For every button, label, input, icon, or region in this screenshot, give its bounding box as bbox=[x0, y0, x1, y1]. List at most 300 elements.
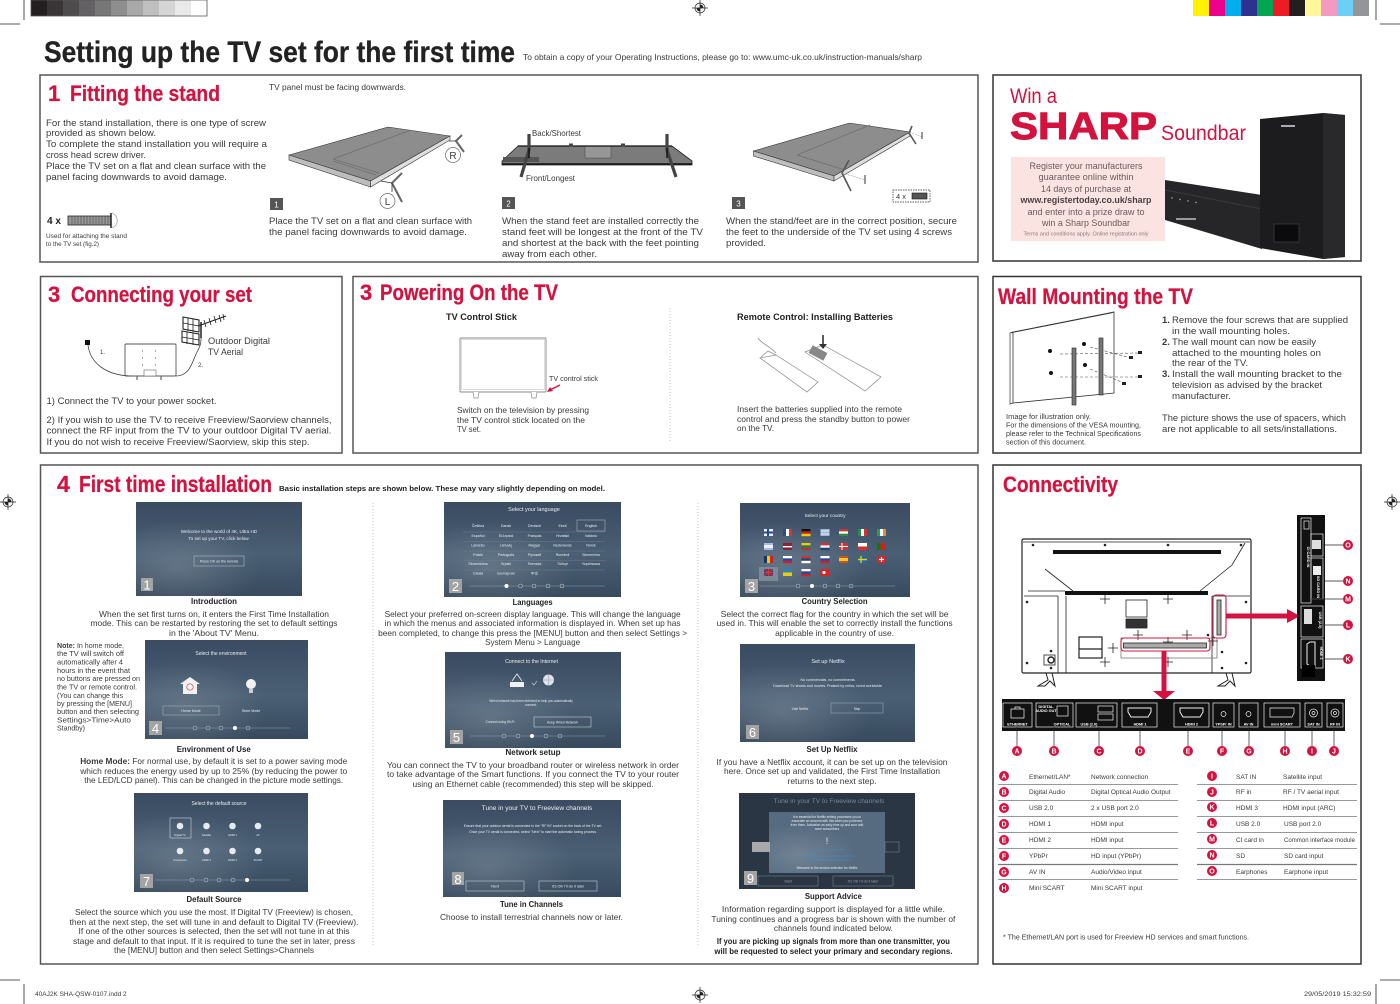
panel: wall mounting bbox=[993, 276, 1361, 453]
key letters on diagram: L bbox=[1346, 622, 1351, 630]
caption: support advice: Support Advice bbox=[805, 892, 862, 901]
intro text: provided as shown below. bbox=[46, 128, 156, 139]
caption 2: When the stand feet are installed correctly the bbox=[502, 216, 699, 227]
text: control stick bbox=[457, 405, 589, 434]
key table: left column: G bbox=[1001, 870, 1007, 876]
screen 2: languages bbox=[444, 502, 621, 597]
arrow: to side connectors bbox=[1226, 609, 1300, 623]
key table: right column: Earphones bbox=[1236, 869, 1268, 876]
screen 9: support advice: 9 bbox=[747, 871, 754, 886]
screen 9: support advice: It is essential for Netflix setting processes you to bbox=[793, 815, 861, 819]
screen 6: set up Netflix: 6 bbox=[749, 725, 756, 740]
steps: 2. bbox=[1162, 337, 1170, 348]
connector bar: side ports: HDMI 3 bbox=[1319, 647, 1323, 659]
caption 2: away from each other. bbox=[502, 249, 597, 260]
footer: file name: 40AJ2K SHA-QSW-0107.indd 2 bbox=[35, 991, 127, 998]
intro text: For the stand installation, there is one type of screw bbox=[46, 118, 266, 129]
heading: Connectivity bbox=[1003, 472, 1119, 497]
instructions: connect the RF input from the TV to your outdoor Digital TV aerial. bbox=[46, 426, 332, 436]
key table: left column: USB 2.0 bbox=[1029, 805, 1054, 812]
intro text: cross head screw driver. bbox=[46, 150, 146, 161]
pink call-out: guarantee online within bbox=[1038, 172, 1134, 182]
instructions: If you do not wish to receive Freeview/Saorview, skip this step. bbox=[46, 437, 310, 448]
connector bar: bottom ports: SAT IN bbox=[1307, 722, 1320, 726]
key table: left column: H bbox=[1001, 886, 1007, 892]
screen 2: languages: Українська bbox=[582, 562, 600, 566]
key table: right column: HDMI input (ARC) bbox=[1283, 805, 1335, 812]
screen 2: languages: Ελληνικά bbox=[499, 534, 513, 538]
screen 2: languages: Dansk bbox=[501, 524, 511, 528]
intro text: Place the TV set on a flat and clean surface with the bbox=[46, 161, 266, 172]
screen 4: environment: Home Mode bbox=[181, 709, 201, 713]
connector bar: bottom ports: AUDIO OUT bbox=[1035, 709, 1057, 713]
connector bar: bottom ports bbox=[1002, 699, 1345, 731]
key table: right column: USB port 2.0 bbox=[1284, 821, 1322, 828]
key table: left column: F bbox=[1002, 854, 1007, 860]
screen 7: default source: HDMI 3 bbox=[228, 858, 237, 862]
text: control stick: Switch on the television by pressing bbox=[457, 405, 589, 415]
key table: right column: J bbox=[1210, 790, 1214, 796]
screw note: to the TV set (fig.2) bbox=[46, 241, 99, 248]
caption: environment of use: Environment of Use bbox=[177, 745, 251, 754]
key table: left column: 2 x USB port 2.0 bbox=[1091, 805, 1139, 812]
text: batteries: on the TV. bbox=[737, 423, 774, 433]
footnote: * The Ethernet/LAN port is used for Freeview HD services and smart functions. bbox=[1003, 932, 1249, 942]
key letters on diagram: J bbox=[1332, 748, 1336, 756]
key table: right column: SAT IN bbox=[1236, 774, 1257, 781]
screen 5: network setup: connect. bbox=[525, 703, 537, 707]
pink call-out: Terms and conditions apply. Online registration only bbox=[1024, 232, 1149, 238]
illustration 1: TV lying flat with stand feet bbox=[289, 127, 464, 208]
screen 7: default source: 7 bbox=[143, 874, 150, 889]
caption: languages: Select your preferred on-screen display language. This will change the language bbox=[385, 609, 681, 619]
text: batteries: control and press the standby button to power bbox=[737, 414, 910, 424]
caption 2: stand feet will be longest at the front of the TV bbox=[502, 227, 704, 238]
key table: left column: HDMI input bbox=[1091, 821, 1124, 828]
pink call-out: Register your manufacturers bbox=[1030, 161, 1143, 171]
key table: left column: Audio/Video input bbox=[1091, 869, 1142, 876]
caption 3: provided. bbox=[726, 238, 766, 249]
illustration 2: TV back with feet: Front/Longest bbox=[526, 173, 576, 183]
illustration 2: TV back with feet bbox=[502, 128, 692, 183]
heading: Connecting your set bbox=[71, 282, 253, 307]
screen 2: languages: Deutsch bbox=[528, 524, 541, 528]
connector bar: bottom ports: OPTICAL bbox=[1054, 722, 1071, 726]
steps: television as advised by the bracket bbox=[1172, 380, 1322, 391]
caption: tune in channels: Tune in Channels bbox=[500, 900, 564, 909]
title: Setting up the TV set for the first time bbox=[44, 36, 515, 69]
key table: left column: B bbox=[1001, 790, 1007, 796]
heading: 3 bbox=[360, 280, 372, 305]
screen 5: network setup: Wired network has been detected to help you automatically bbox=[489, 699, 573, 703]
caption: country selection bbox=[717, 597, 953, 638]
screen 7: default source: SCART bbox=[254, 858, 263, 862]
screw note: Used for attaching the stand bbox=[46, 233, 127, 240]
screen 6: set up Netflix bbox=[740, 644, 915, 742]
instructions bbox=[46, 396, 332, 448]
screen 4: environment bbox=[145, 640, 308, 739]
caption 2 bbox=[502, 216, 704, 260]
screen 2: languages: Български bbox=[497, 572, 515, 576]
key table: right column: M bbox=[1209, 836, 1215, 844]
screen 8: tune in channels: Tune in your TV to Freeview channels bbox=[482, 805, 593, 812]
key table: right column: Common interface module bbox=[1284, 837, 1355, 844]
caption: support advice: If you are picking up signals from more than one transmitter, you bbox=[717, 936, 950, 946]
printer grayscale bar bbox=[31, 0, 207, 16]
screen 2: languages: Italiano bbox=[585, 534, 597, 538]
key letters on diagram: N bbox=[1345, 578, 1351, 586]
caption: environment of use: Home Mode: For normal use, by default it is set to a power saving mode bbox=[80, 756, 347, 766]
caption: network setup bbox=[387, 748, 679, 789]
diagram: TV rear bbox=[1022, 539, 1251, 686]
screen 2: languages: English bbox=[585, 524, 597, 528]
screw note bbox=[46, 233, 127, 248]
screen 6: set up Netflix: No commercials, no commitments. bbox=[800, 678, 856, 682]
caption: set up Netflix: here. Once set up and validated, the First Time Installation bbox=[724, 766, 940, 776]
key table: left column: Mini SCART bbox=[1029, 885, 1065, 892]
caption: environment of use: which reduces the energy used by up to 25% (by reducing the power to bbox=[79, 766, 347, 776]
connector bar: side ports bbox=[1297, 515, 1325, 681]
caption: country selection: Select the correct flag for the country in which the set will be bbox=[721, 609, 949, 619]
screen 7: default source: AV bbox=[256, 833, 260, 837]
caption 1: Place the TV set on a flat and clean surface with bbox=[269, 216, 472, 227]
note: home mode: Note: In home mode, bbox=[57, 641, 124, 650]
screen 2: languages: Nederlands bbox=[553, 544, 572, 548]
note: home mode: Standby) bbox=[57, 724, 85, 732]
pink call-out bbox=[1011, 157, 1165, 241]
screen 2: languages: Magyar bbox=[529, 544, 541, 548]
caption: languages: System Menu > Language bbox=[485, 637, 580, 647]
caption: environment of use: the LED/LCD panel). This can be changed in the picture mode settings. bbox=[84, 775, 343, 785]
screen 2: languages: Português bbox=[498, 553, 514, 557]
screen 2: languages: Latviešu bbox=[471, 544, 485, 548]
illustration note: section of this document. bbox=[1006, 440, 1086, 446]
caption: support advice: Information regarding support is displayed for a little while. bbox=[722, 904, 945, 914]
screen 2: languages: Select your language bbox=[508, 507, 560, 513]
key letters on diagram: F bbox=[1220, 748, 1225, 756]
key table: right column: CI card in bbox=[1236, 837, 1264, 844]
illustration note: Image for illustration only. bbox=[1006, 414, 1091, 421]
screen 2: languages: Polski bbox=[473, 553, 483, 557]
note: home mode: (You can change this bbox=[57, 691, 123, 700]
screen 2: languages: Français bbox=[528, 534, 542, 538]
caption: introduction: in the 'About TV' Menu. bbox=[169, 628, 259, 638]
steps: manufacturer. bbox=[1172, 391, 1231, 402]
key table: right column: L bbox=[1210, 820, 1215, 828]
key table: left column: HDMI input bbox=[1091, 837, 1124, 844]
screen 6: set up Netflix: Visit Netflix bbox=[792, 707, 809, 711]
text: control stick: TV set. bbox=[457, 424, 481, 434]
step badge 1: 1 bbox=[274, 200, 279, 210]
key table: right column: K bbox=[1209, 804, 1215, 812]
key table: left column: Mini SCART input bbox=[1091, 885, 1143, 892]
screen 2: languages: Română bbox=[556, 553, 569, 557]
caption: default source: Default Source bbox=[186, 895, 242, 904]
connector bar: bottom ports: AV IN bbox=[1244, 722, 1254, 726]
caption: introduction bbox=[90, 597, 338, 638]
caption: set up Netflix: returns to the next step. bbox=[788, 776, 876, 786]
screen 9: support advice: from them. Activation as early time up and sure add bbox=[791, 823, 864, 827]
screen 8: tune in channels: It's OK I'll do it later bbox=[552, 884, 585, 888]
footer: date stamp: 29/05/2019 15:32:59 bbox=[1304, 991, 1371, 998]
panel: fitting the stand bbox=[40, 75, 978, 262]
steps: 3. bbox=[1162, 369, 1170, 380]
panel: first time installation bbox=[40, 465, 978, 964]
key letters on diagram: H bbox=[1282, 748, 1288, 756]
screen 1: introduction: Welcome to the world of 4K, Ultra HD bbox=[181, 529, 258, 534]
text: batteries bbox=[737, 404, 910, 433]
note: home mode: Settings>Time>Auto bbox=[57, 716, 131, 724]
key table: left column: HD input (YPbPr) bbox=[1091, 853, 1141, 860]
pink call-out: www.registertoday.co.uk/sharp bbox=[1020, 195, 1152, 205]
step badge 1 bbox=[270, 198, 283, 210]
screw callout: 4 x bbox=[896, 192, 906, 201]
key letters on diagram: E bbox=[1186, 748, 1191, 756]
screen 2: languages: Türkçe bbox=[557, 562, 568, 566]
connector bar: bottom ports: YPbPr IN bbox=[1215, 722, 1232, 726]
printer colour bar bbox=[1193, 0, 1369, 16]
caption: network setup: You can connect the TV to your broadband router or wireless network in order bbox=[387, 760, 679, 770]
pink call-out: and enter into a prize draw to bbox=[1028, 207, 1144, 217]
screen 1: introduction: Press OK on the remote bbox=[200, 560, 238, 564]
pink call-out: 14 days of purchase at bbox=[1041, 184, 1131, 194]
caption: country selection: Country Selection bbox=[802, 597, 868, 606]
connector bar: bottom ports: mini SCART bbox=[1271, 722, 1294, 726]
screen 9: support advice: ! bbox=[826, 836, 828, 846]
steps: The wall mount can now be easily bbox=[1172, 337, 1316, 348]
caption: introduction: When the set first turns on, it enters the First Time Installation bbox=[99, 609, 329, 619]
screen 2: languages: Hrvatski bbox=[556, 534, 569, 538]
heading: Fitting the stand bbox=[70, 81, 220, 106]
screen 5: network setup: Connect to the Internet bbox=[505, 659, 558, 665]
illustration: TV front with control stick bbox=[460, 338, 598, 398]
screen 7: default source: HDMI 1 bbox=[228, 833, 237, 837]
steps bbox=[1162, 315, 1348, 435]
caption: introduction: Introduction bbox=[191, 597, 237, 606]
diagram: TV, plug and aerial bbox=[85, 314, 270, 380]
key table: left column: Network connection bbox=[1091, 774, 1148, 781]
caption: default source: Select the source which you use the most. If Digital TV (Freeview) is chosen, bbox=[75, 907, 353, 917]
screen 2: languages: Català bbox=[473, 572, 483, 576]
icon: screw: 4 x bbox=[47, 216, 61, 227]
screen 1: introduction: 1 bbox=[143, 578, 151, 592]
steps: Install the wall mounting bracket to the bbox=[1172, 369, 1342, 380]
panel: connectivity bbox=[993, 465, 1361, 964]
text: control stick: the TV control stick located on the bbox=[457, 415, 585, 425]
key table: right column: Earphone input bbox=[1284, 869, 1328, 876]
key letters on diagram: D bbox=[1137, 748, 1143, 756]
screen 2: languages: 中文 bbox=[531, 570, 538, 576]
connector bar: bottom ports: HDMI 1 bbox=[1134, 722, 1146, 726]
key table: right column: O bbox=[1209, 868, 1215, 876]
screen 2: languages: Svenska bbox=[528, 562, 541, 566]
connector bar: bottom ports: USB (2.0) bbox=[1081, 722, 1098, 726]
steps: 1. bbox=[1162, 315, 1170, 326]
caption: network setup: using an Ethernet cable (recommended) this step will be skipped. bbox=[412, 779, 654, 789]
note: home mode: no buttons are pressed on bbox=[57, 674, 140, 683]
caption: set up Netflix: If you have a Netflix account, it can be set up on the television bbox=[716, 757, 948, 767]
heading: Powering On the TV bbox=[380, 280, 558, 305]
note: home mode: by pressing the [MENU] bbox=[57, 699, 132, 708]
steps: in the wall mounting holes. bbox=[1172, 326, 1290, 337]
key table: right column: RF / TV aerial input bbox=[1283, 789, 1339, 796]
key table: left column: C bbox=[1001, 806, 1007, 812]
caption: support advice: will be requested to select your primary and secondary regions. bbox=[713, 946, 952, 956]
caption: support advice bbox=[711, 892, 956, 956]
key letters on diagram: G bbox=[1246, 748, 1252, 756]
panel: win a Sharp soundbar bbox=[993, 75, 1361, 261]
note: panel down: TV panel must be facing downwards. bbox=[269, 82, 406, 92]
screen 2: languages: Srpski bbox=[501, 562, 511, 566]
caption: languages: Languages bbox=[513, 598, 553, 607]
key table: left column: A bbox=[1001, 774, 1007, 780]
logo: SHARP: SHARP bbox=[1010, 106, 1157, 148]
note: home mode: the TV or remote control. bbox=[57, 682, 137, 692]
key letters on diagram: B bbox=[1051, 748, 1057, 756]
steps: attached to the mounting holes on bbox=[1172, 348, 1321, 359]
screen 7: default source bbox=[134, 793, 308, 892]
screen 4: environment: 4 bbox=[152, 721, 159, 736]
screen 9: support advice: Tune in your TV to Freeview channels bbox=[774, 798, 885, 805]
screen 2: languages: 2 bbox=[452, 579, 459, 594]
screen 9: support advice: It's OK I'll do it later bbox=[848, 880, 879, 884]
screen 4: environment: Select the environment bbox=[195, 651, 247, 657]
key table: left column: HDMI 2 bbox=[1029, 837, 1051, 844]
subtitle: instructions link: To obtain a copy of your Operating Instructions, please go to: www.umc-uk.co.uk/instruction-manuals/sharp bbox=[523, 52, 922, 62]
caption: default source: then at the next step, the set will tune in and default to Digital TV (Freeview). bbox=[70, 917, 358, 927]
screen 2: languages: Čeština bbox=[472, 523, 484, 528]
screen 5: network setup: Keep Wired Network bbox=[547, 720, 578, 724]
key table: right column: RF in bbox=[1236, 789, 1252, 796]
key table: left column: E bbox=[1002, 838, 1007, 844]
caption: country selection: applicable in the country of use. bbox=[775, 628, 894, 638]
panel: powering on the TV bbox=[353, 276, 978, 453]
screen 5: network setup: Connect using Wi-Fi bbox=[486, 720, 515, 724]
panel: connecting your set bbox=[40, 276, 342, 453]
text: batteries: Insert the batteries supplied into the remote bbox=[737, 404, 902, 414]
caption 1 bbox=[269, 216, 472, 238]
key table: right column: SD card input bbox=[1284, 853, 1324, 860]
caption: country selection: used in. This will enable the set to correctly install the functions bbox=[717, 618, 953, 628]
note: home mode: hours in the event that bbox=[57, 666, 131, 675]
key letters on diagram: M bbox=[1345, 596, 1351, 604]
illustration: TV front with control stick: TV control stick bbox=[549, 376, 598, 383]
screen 8: tune in channels: 8 bbox=[454, 872, 462, 887]
screen 2: languages: Español bbox=[472, 534, 485, 538]
caption 3: When the stand/feet are in the correct position, secure bbox=[726, 216, 957, 227]
key table: left column bbox=[998, 771, 1178, 893]
key letters on diagram: A bbox=[1014, 748, 1020, 756]
key table: right column: HDMI 3 bbox=[1236, 805, 1258, 812]
screen 4: environment: Store Mode bbox=[242, 709, 260, 713]
screen 2: languages: Русский bbox=[528, 553, 541, 557]
step badge 3 bbox=[732, 197, 745, 209]
key table: right column: Satellite input bbox=[1283, 774, 1322, 781]
caption: default source: stage and default to that input. If it is required to tune the set in later, press bbox=[73, 936, 355, 946]
screen 2: languages: Slovenčina bbox=[582, 553, 600, 557]
step badge 3: 3 bbox=[736, 200, 741, 208]
screen 9: support advice: associate an account with this when you purchase bbox=[792, 819, 863, 823]
caption: set up Netflix: Set Up Netflix bbox=[806, 745, 858, 754]
illustration 3: TV with feet attached bbox=[754, 123, 922, 191]
connector bar: side ports: USB (2.0) bbox=[1318, 612, 1322, 629]
caption 3: the feet to the underside of the TV set using 4 screws bbox=[726, 227, 952, 238]
diagram: TV, plug and aerial: Outdoor Digital bbox=[208, 336, 270, 346]
screen 6: set up Netflix: Skip bbox=[854, 707, 860, 711]
intro text: To complete the stand installation you will require a bbox=[46, 139, 268, 150]
steps: The picture shows the use of spacers, which bbox=[1162, 413, 1346, 424]
screen 7: default source: HDMI 2 bbox=[202, 858, 211, 862]
screen 6: set up Netflix: Set up Netflix bbox=[811, 659, 845, 665]
key table: right column: USB 2.0 bbox=[1236, 821, 1261, 828]
connector bar: bottom ports: DIGITAL bbox=[1039, 705, 1054, 709]
note: home mode bbox=[57, 641, 140, 732]
screw callout bbox=[893, 190, 930, 202]
caption: languages: in which the menus and associated information is displayed in. When set up has bbox=[385, 618, 681, 628]
screen 2: languages: Eesti bbox=[558, 524, 567, 528]
heading: 1 bbox=[48, 81, 60, 106]
caption: default source bbox=[70, 895, 358, 955]
key letters on diagram bbox=[1012, 540, 1353, 756]
key table: right column: N bbox=[1209, 852, 1215, 860]
sub-heading: batteries: Remote Control: Installing Batteries bbox=[737, 312, 893, 322]
screen 5: network setup bbox=[445, 652, 621, 748]
note: home mode: button and then selecting bbox=[57, 707, 139, 716]
key letters on diagram: K bbox=[1345, 656, 1351, 664]
screen 2: languages: Lietuvių bbox=[500, 544, 512, 548]
heading: 4 bbox=[57, 471, 70, 497]
key table: left column: YPbPr bbox=[1029, 853, 1049, 860]
note: home mode: the TV will switch off bbox=[57, 649, 125, 658]
screen 8: tune in channels bbox=[443, 800, 621, 897]
caption: default source: If one of the other sources is selected, then the set will not tune in at this bbox=[78, 926, 350, 936]
caption: support advice: Tuning continues and a progress bar is shown with the number of bbox=[711, 914, 956, 924]
instructions: 2) If you wish to use the TV to receive Freeview/Saorview channels, bbox=[46, 415, 332, 426]
key table: left column: AV IN bbox=[1029, 869, 1046, 876]
heading: First time installation bbox=[79, 471, 272, 497]
key table: right column: I bbox=[1211, 774, 1213, 780]
diagram: TV, plug and aerial: TV Aerial bbox=[208, 347, 243, 357]
illustration: remote control batteries bbox=[758, 335, 881, 392]
connector bar: bottom ports: HDMI 2 bbox=[1185, 722, 1198, 726]
caption: introduction: mode. This can be restarted by restoring the set to default settings bbox=[90, 618, 338, 628]
caption: tune in channels: Choose to install terrestrial channels now or later. bbox=[440, 912, 623, 922]
screen 1: introduction: To set up your TV, click below. bbox=[188, 536, 250, 541]
intro text bbox=[46, 118, 268, 183]
screen 3: country selection: Select your country bbox=[804, 513, 846, 519]
intro text: panel facing downwards to avoid damage. bbox=[46, 172, 227, 183]
key table: right column: SD bbox=[1236, 853, 1245, 860]
screen 2: languages: Norsk bbox=[586, 544, 596, 548]
screen 2: languages: Slovenščina bbox=[468, 562, 488, 566]
key letters on diagram: O bbox=[1345, 542, 1351, 550]
caption 3 bbox=[726, 216, 957, 249]
heading: win a: Win a bbox=[1010, 85, 1057, 108]
icon: screw bbox=[47, 213, 117, 228]
steps: the rear of the TV. bbox=[1172, 358, 1248, 369]
connector bar: bottom ports: ETHERNET bbox=[1007, 722, 1028, 726]
screen 8: tune in channels: Ensure that your outdoor aerial is connected to the "RF IN" socket on the back of the TV set. bbox=[464, 824, 602, 828]
caption: languages: been completed, to change this press the [MENU] button and then select Settings > bbox=[378, 628, 687, 638]
key letters on diagram: C bbox=[1096, 748, 1102, 756]
screen 9: support advice: Welcome to the service selection for Netflix bbox=[797, 866, 858, 870]
screen 7: default source: Digital TV bbox=[174, 833, 186, 837]
connector bar: side ports: SD CARD IN bbox=[1316, 576, 1320, 598]
connector bar: side ports: CI CARD IN bbox=[1306, 547, 1310, 568]
steps: are not applicable to all sets/installations. bbox=[1162, 424, 1337, 435]
caption: languages bbox=[378, 598, 687, 647]
illustration 1: TV lying flat with stand feet: L bbox=[385, 197, 391, 208]
